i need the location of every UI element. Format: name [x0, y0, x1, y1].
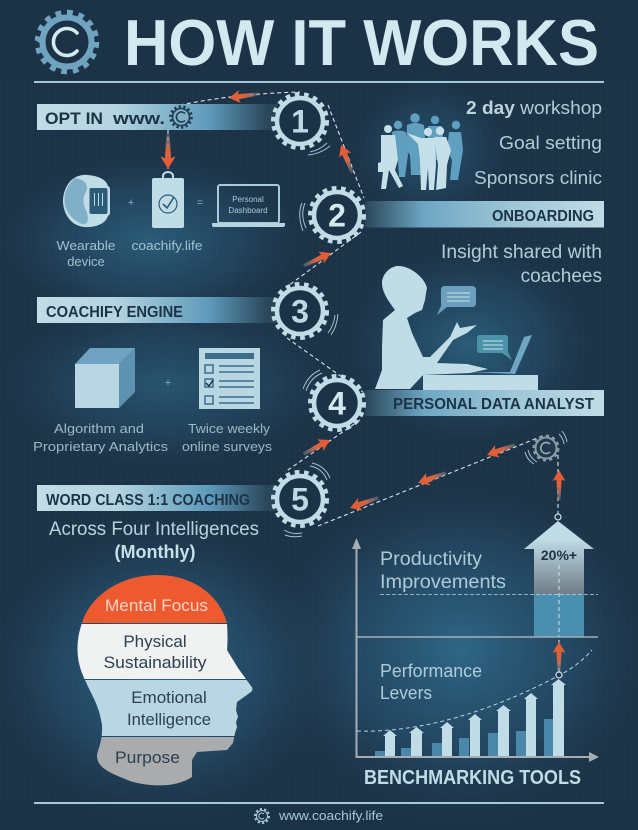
- bar: opt in: OPT IN: [45, 109, 103, 128]
- gear 2: 2: [328, 198, 346, 234]
- big arrow 20%: 20%+: [541, 547, 577, 563]
- chart: benchmarking: [352, 514, 599, 789]
- text: workshop list: Goal setting: [499, 132, 602, 153]
- label: surveys: [182, 421, 273, 454]
- text: workshop list: 2 day workshop: [466, 97, 602, 118]
- icon: speech bubble top: [437, 286, 476, 315]
- band label: emotional intelligence: Emotional: [131, 688, 207, 707]
- gear 5: 5: [291, 482, 309, 518]
- label: algorithm: Proprietary Analytics: [33, 439, 169, 454]
- icon: analyst silhouette with desk: [375, 266, 538, 390]
- trend marker: [556, 672, 562, 678]
- header rule: [34, 81, 604, 83]
- label: productivity improvements: Improvements: [380, 572, 506, 593]
- bar: opt in: [37, 104, 277, 130]
- band label: physical sustainability: Physical: [123, 632, 187, 651]
- orange arrows: [161, 87, 566, 672]
- icon: personal dashboard laptop: Personal: [232, 195, 264, 204]
- band label: emotional intelligence: Intelligence: [127, 710, 211, 729]
- plus sign: +: [165, 377, 171, 389]
- icon: group of people: [378, 113, 463, 190]
- band label: purpose: Purpose: [115, 748, 180, 767]
- footer rule: [34, 802, 604, 804]
- icon: coachify.life tag: [152, 172, 184, 228]
- bar: world class coaching: [37, 485, 277, 511]
- gear 4: [303, 370, 364, 430]
- text: insight shared: Insight shared with: [441, 242, 602, 263]
- band label: emotional intelligence: [127, 688, 211, 729]
- text: monthly: (Monthly): [115, 542, 195, 562]
- label: surveys: online surveys: [182, 439, 273, 454]
- bar: coachify engine: [37, 297, 277, 323]
- dark bars: [375, 719, 553, 756]
- bar: personal data analyst: PERSONAL DATA ANALYST: [393, 396, 595, 413]
- label: surveys: Twice weekly: [188, 421, 271, 436]
- gear 1: [274, 94, 330, 155]
- flow path dashed: [168, 92, 559, 672]
- icon: personal dashboard laptop: [212, 185, 285, 227]
- text: across four intelligences: Across Four Intelligences: [49, 519, 259, 540]
- text: insight shared: coachees: [521, 266, 602, 287]
- label: algorithm: Algorithm and: [54, 421, 144, 436]
- icon: survey form: [199, 348, 260, 409]
- label: performance levers: [380, 661, 482, 703]
- bar: onboarding: [365, 201, 604, 228]
- band label: mental focus: Mental Focus: [105, 596, 208, 615]
- bar: personal data analyst: [365, 390, 604, 416]
- label: wearable device: [56, 238, 116, 269]
- text: insight shared: [441, 242, 602, 287]
- bar: onboarding: ONBOARDING: [492, 208, 594, 225]
- band label: physical sustainability: [104, 632, 207, 672]
- icon: laptop: [470, 335, 532, 374]
- label: algorithm: [33, 421, 169, 454]
- icon: personal dashboard laptop: Dashboard: [228, 206, 268, 215]
- label: productivity improvements: Productivity: [380, 549, 483, 570]
- label: performance levers: Levers: [380, 683, 432, 703]
- bar: world class coaching: WORD CLASS 1:1 COACHING: [46, 492, 250, 509]
- label: productivity improvements: [380, 549, 506, 593]
- label: performance levers: Performance: [380, 661, 482, 681]
- icon: speech bubble lower: [477, 335, 512, 360]
- bar: coachify engine: COACHIFY ENGINE: [46, 304, 183, 321]
- gear 5: [274, 463, 330, 537]
- gear 3: 3: [291, 294, 309, 330]
- text: workshop list: [466, 97, 602, 188]
- label: coachify.life: coachify.life: [132, 238, 202, 253]
- gear 2: [300, 188, 364, 242]
- band label: physical sustainability: Sustainability: [104, 653, 207, 672]
- gear 4: 4: [328, 386, 346, 422]
- plus sign: +: [128, 197, 134, 209]
- trend curve: [357, 650, 592, 731]
- equals sign: =: [197, 197, 203, 209]
- icon: smart watch: [63, 175, 110, 227]
- small gear: [525, 431, 567, 464]
- big arrow 20%: [524, 514, 594, 637]
- logo gear: [38, 13, 96, 71]
- footer: www.coachify.life: [278, 809, 383, 823]
- head diagram: [77, 575, 252, 786]
- text: workshop list: Sponsors clinic: [474, 167, 602, 188]
- light arrow bars: [383, 679, 566, 756]
- title: HOW IT WORKS: [124, 6, 599, 79]
- label: wearable device: Wearable: [56, 238, 116, 253]
- icon: algorithm box: [75, 348, 135, 408]
- bar: opt in: www.: [112, 109, 165, 128]
- gear 3: [274, 284, 338, 338]
- label: wearable device: device: [67, 254, 105, 269]
- gear 1: 1: [291, 104, 309, 140]
- heading: benchmarking tools: BENCHMARKING TOOLS: [364, 767, 581, 789]
- axes: [352, 538, 599, 762]
